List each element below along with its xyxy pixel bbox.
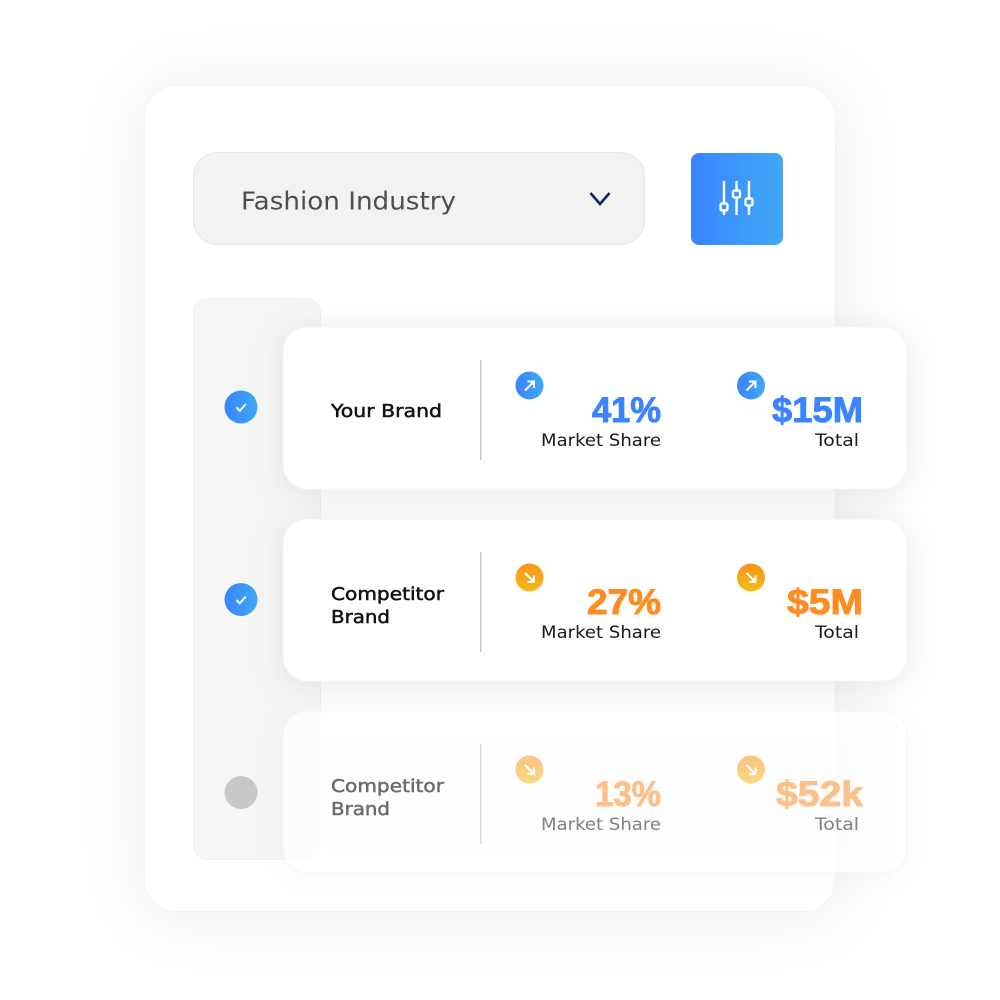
panel: selection sidebar xyxy=(194,298,320,860)
icon: trend down market share xyxy=(516,564,544,592)
panel: main dashboard card xyxy=(144,86,836,912)
dropdown label: Fashion Industry xyxy=(241,186,456,216)
market share label: Market Share xyxy=(541,431,661,450)
total label: Total xyxy=(814,815,859,834)
brand name: Competitor xyxy=(331,584,445,605)
panel: faded competitor brand row: Brand xyxy=(331,799,390,820)
market share label: Market Share xyxy=(541,623,661,642)
brand name: Your Brand xyxy=(330,401,442,422)
market share value: 13% xyxy=(595,775,661,814)
icon: trend up total xyxy=(737,372,765,400)
checkbox: competitor brand selected xyxy=(224,583,258,616)
market share value: 41% xyxy=(592,391,661,430)
panel: faded competitor brand row xyxy=(283,711,907,873)
brand name: Competitor xyxy=(331,776,445,797)
market share label: Market Share xyxy=(541,815,661,834)
industry dropdown xyxy=(194,152,644,244)
icon: dropdown chevron xyxy=(590,193,610,204)
checkbox: competitor brand unselected xyxy=(224,776,258,809)
icon: sliders xyxy=(720,181,752,215)
panel: your brand row xyxy=(283,327,907,489)
icon: trend down total xyxy=(737,564,765,592)
filter button xyxy=(691,153,783,245)
panel: competitor brand row xyxy=(283,519,907,681)
total label: Total xyxy=(814,431,859,450)
panel: competitor brand row: Brand xyxy=(331,607,390,628)
icon: trend down total xyxy=(737,756,765,784)
total value: $52k xyxy=(776,775,864,814)
total value: $15M xyxy=(772,391,863,430)
checkbox: your brand selected xyxy=(224,390,258,424)
market share value: 27% xyxy=(587,583,661,622)
total value: $5M xyxy=(787,583,863,622)
total label: Total xyxy=(814,623,859,642)
icon: trend up market share xyxy=(516,372,544,400)
icon: trend down market share xyxy=(516,756,544,784)
